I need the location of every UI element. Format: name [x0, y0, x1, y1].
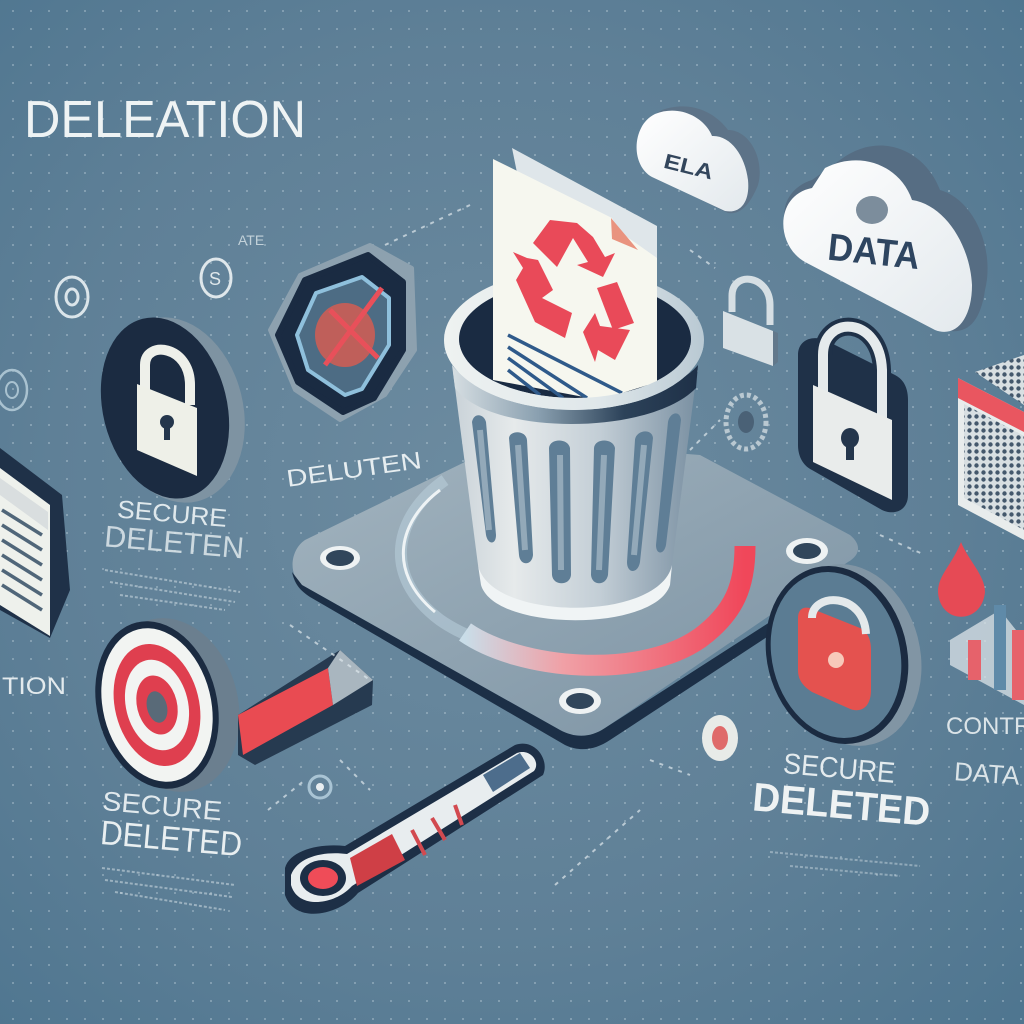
- icon: thermometer slider: [285, 744, 545, 914]
- bin rim back and interior: [444, 270, 704, 410]
- icon: dollar token: S: [209, 269, 221, 289]
- label: secure deleted right: DELETED: [751, 775, 932, 835]
- label: contr data: DATA: [953, 756, 1021, 791]
- icon: dollar token: [201, 259, 231, 297]
- icon: gear token: [726, 395, 766, 449]
- label: secure deleted left: [99, 786, 244, 910]
- icon: document left: [0, 448, 70, 638]
- icon: forbidden badge: [270, 245, 415, 420]
- label: tion: TION: [2, 673, 66, 700]
- bin rim front: [444, 345, 704, 410]
- icon: lock badge: [83, 302, 264, 518]
- progress arc: [401, 480, 745, 665]
- icon: data panel right: [958, 355, 1024, 540]
- icon: small cloud: [637, 106, 760, 213]
- label: secure deleted left: SECURE: [101, 786, 223, 826]
- label: secure deleten: DELETEN: [103, 520, 245, 565]
- icon: data cloud: [783, 146, 988, 332]
- icon: red eraser: [238, 650, 373, 765]
- bin body: [452, 365, 698, 620]
- label: secure deleten: SECURE: [116, 495, 228, 533]
- title: DELEATION: [24, 91, 306, 149]
- cloud label: DATA: [826, 227, 922, 278]
- recycle symbol: [513, 220, 634, 362]
- label: deleten: DELUTEN: [285, 447, 423, 493]
- icon: big padlock: [798, 327, 908, 512]
- icon: red lock badge: [747, 549, 940, 761]
- label: contr data: [946, 713, 1024, 791]
- icon: target: [78, 604, 257, 806]
- icon: small padlock: [723, 279, 778, 366]
- icon: left token: [0, 370, 27, 410]
- label: secure deleted right: [751, 748, 932, 876]
- connector lines: [268, 205, 925, 885]
- document in bin: [493, 148, 657, 400]
- icon: small target token: [56, 277, 88, 317]
- icon: small circle token: [309, 776, 331, 798]
- icon: small target dot: [702, 715, 738, 761]
- label: secure deleten: [103, 495, 245, 610]
- cloud label: ELA: [661, 150, 715, 184]
- small label: ate: ATE: [238, 232, 264, 248]
- icon: droplet and bars: [938, 542, 1024, 705]
- label: secure deleted left: DELETED: [99, 814, 244, 864]
- trash bin: [444, 148, 704, 620]
- platform: [292, 440, 858, 749]
- label: secure deleted right: SECURE: [782, 748, 896, 790]
